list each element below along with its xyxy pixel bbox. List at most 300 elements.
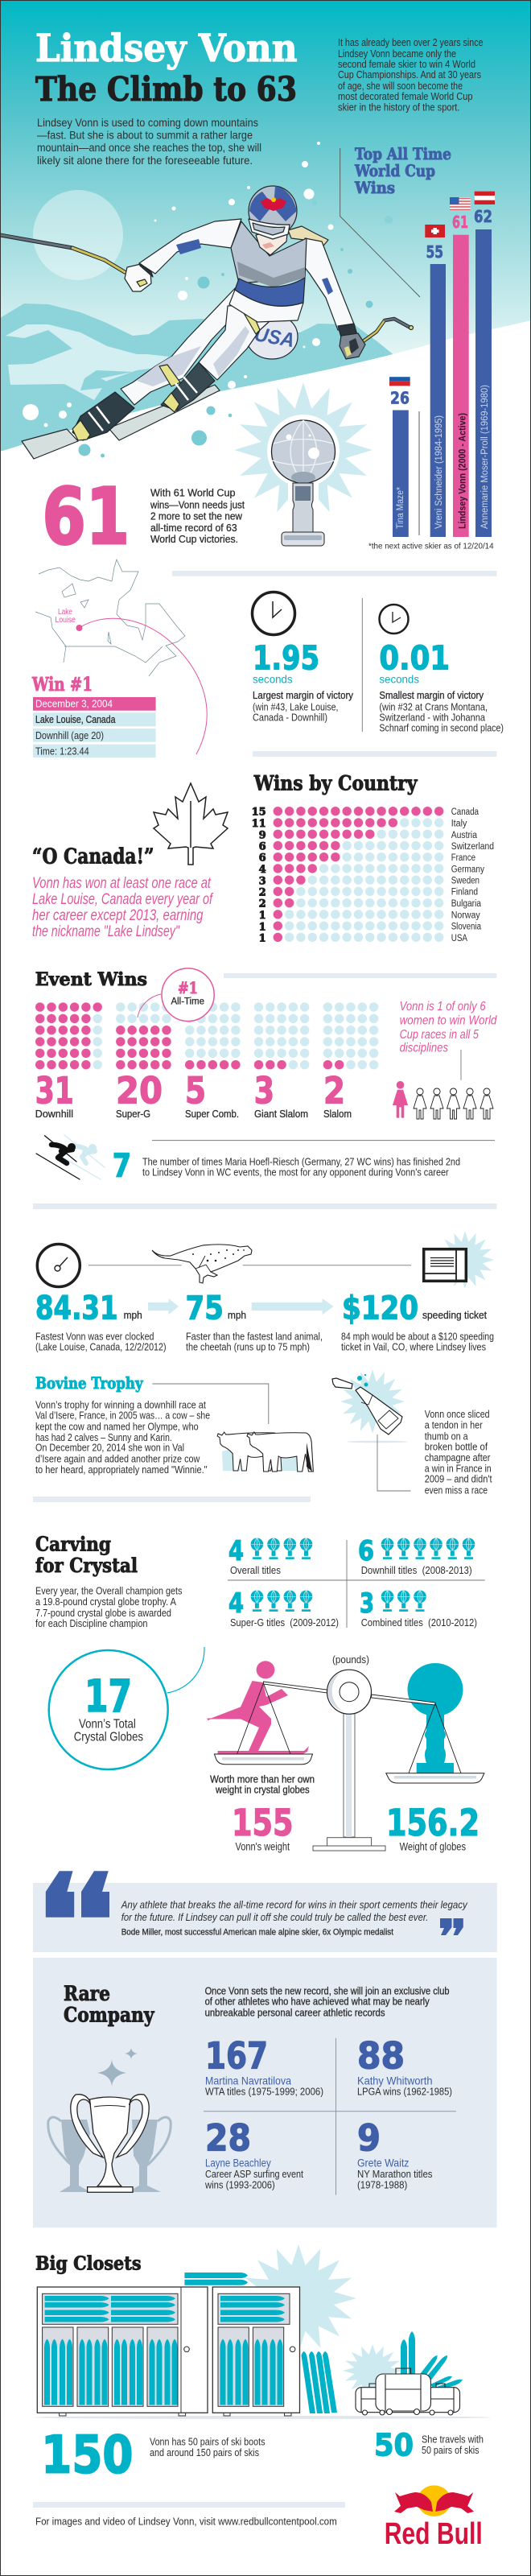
row: event (33, 729, 156, 742)
panel: wins by country: Wins by Country (253, 772, 418, 795)
numbers and event labels: 5 (185, 1070, 206, 1113)
panel: second place stat: 7 (113, 1148, 131, 1185)
panel: champagne (332, 1369, 492, 1496)
quote text (121, 1899, 468, 1937)
panel: Bode Miller quote (33, 1871, 497, 1952)
panel: balance scale (208, 1653, 484, 1852)
stat: 75 mph: mph (228, 1309, 246, 1321)
panel: margins of victory (253, 592, 504, 733)
counts: 11 (252, 818, 266, 830)
icon: two skiers (36, 1135, 105, 1179)
record: Layne Beachley: 28 (205, 2117, 251, 2160)
paragraph: even miss a race (425, 1485, 488, 1496)
numbers and event labels: 2 (323, 1070, 345, 1113)
bar: Lindsey Vonn: Lindsey Vonn (2000 - Active) (459, 413, 468, 529)
chart heading (354, 144, 451, 197)
stat: 75 mph (186, 1290, 323, 1352)
panel: big closets (34, 2244, 491, 2486)
paragraph: a win in France in (425, 1463, 492, 1474)
bar: Vreni Schneider (425, 225, 446, 537)
stat: smallest margin: (win #32 at Crans Montana, (379, 701, 488, 712)
panel: 17 total crystal globes: Crystal Globes (74, 1731, 143, 1744)
helmet logo (261, 198, 286, 211)
numbers and event labels: Downhill (35, 1108, 73, 1120)
second intro text: most decorated female World Cup (338, 90, 473, 102)
arrow (252, 1298, 334, 1315)
stat: smallest margin: seconds (379, 672, 419, 685)
icon: cows (217, 1432, 313, 1472)
stat: largest margin: 1.95 (253, 639, 319, 678)
dots: slalom (322, 1001, 380, 1071)
counts (252, 807, 266, 944)
pink italic paragraph: her career except 2013, earning (32, 907, 204, 924)
paragraph: for each Discipline champion (35, 1618, 148, 1629)
Lake Louise label (55, 608, 76, 625)
paragraph: has had 2 calves – Sunny and Karin. (35, 1432, 172, 1443)
country names: Austria (451, 831, 478, 840)
stat: 84.31 mph: (Lake Louise, Canada, 12/2/2012) (35, 1341, 167, 1352)
divider (172, 571, 496, 576)
numbers and event labels: Slalom (323, 1108, 352, 1120)
stat: 84.31 mph: mph (124, 1309, 142, 1321)
panel: win #1: Win #1 (31, 674, 93, 696)
stat: smallest margin (379, 639, 504, 733)
panel: wins by country (252, 772, 494, 944)
bar: Annemarie Moser-Proll (474, 192, 495, 537)
panel: win #1 (31, 674, 156, 758)
stat: $120 speeding ticket: ticket in Vail, CO, where Lindsey lives (341, 1341, 486, 1352)
chart heading: Wins (354, 178, 395, 197)
numbers and event labels: 3 (254, 1070, 274, 1113)
boots (72, 392, 134, 440)
country names: Finland (451, 888, 478, 898)
paragraph: Vonn’s trophy for winning a downhill race at (35, 1399, 206, 1410)
stat: 84.31 mph (35, 1290, 167, 1352)
stat: 150 pairs: Vonn has 50 pairs of ski boots (150, 2435, 266, 2447)
left glove (125, 264, 151, 291)
panel: speed (35, 1231, 494, 1352)
stat: smallest margin: Switzerland - with Johanna (379, 712, 485, 723)
record: Kathy Whitworth (357, 2034, 452, 2098)
paragraph (205, 1984, 449, 2018)
titles: combined (360, 1587, 477, 1629)
intro text: Lindsey Vonn is used to coming down mountains (37, 116, 258, 129)
stat: smallest margin: Schnarf coming in second place) (379, 722, 504, 733)
paragraph: a tendon in her (425, 1419, 483, 1430)
panel: event wins: Event Wins (35, 969, 147, 990)
second intro text: Cup Championships. And at 30 years (338, 68, 481, 80)
heading: Carving (35, 1533, 111, 1556)
hip with USA lettering: USA (253, 323, 296, 352)
record: Layne Beachley: Layne Beachley (205, 2157, 271, 2169)
paragraph: of other athletes who have achieved what may be nearly (205, 1996, 430, 2008)
paragraph: broken bottle of (425, 1441, 488, 1452)
panel: balance scale: (pounds) (332, 1653, 369, 1666)
heading: for Crystal (35, 1554, 138, 1577)
second intro text: of age, she will soon become the (338, 80, 463, 92)
stat description (150, 487, 245, 545)
counts: 3 (259, 875, 266, 887)
panel: O Canada: “O Canada!” (32, 845, 154, 869)
icon: large clock (253, 592, 294, 634)
pink italic note: Cup races in all 5 (400, 1028, 479, 1042)
heading: Company (64, 2004, 155, 2027)
quote text: Any athlete that breaks the all-time record for wins in their sport cements their legacy (121, 1899, 468, 1911)
counts: 6 (259, 852, 266, 865)
stat: largest margin: seconds (253, 672, 293, 685)
snow flakes (23, 142, 393, 457)
logo: Red Bull: Red Bull (385, 2517, 483, 2551)
counts: 2 (259, 886, 266, 898)
record: Layne Beachley (204, 2117, 303, 2191)
bar: Lindsey Vonn: 61 (452, 213, 468, 232)
panel: rare company (33, 1958, 496, 2227)
starburst (241, 2244, 356, 2352)
hair (288, 226, 328, 250)
luggage with skis (343, 2331, 463, 2415)
paragraph: On December 20, 2014 she won in Val (35, 1443, 184, 1454)
second intro text (338, 36, 483, 113)
row: time: Time: 1:23.44 (35, 745, 89, 758)
country names: Norway (451, 911, 480, 921)
description: The number of times Maria Hoefl-Riesch (Germany, 27 WC wins) has finished 2nd (142, 1156, 460, 1167)
divider (33, 1496, 311, 1502)
stat: weight of globes: 156.2 (386, 1802, 480, 1844)
pink italic paragraph: the nickname "Lake Lindsey" (32, 923, 180, 940)
panel: event wins (35, 968, 497, 1120)
icon: crystal globe trophy (234, 382, 373, 549)
intro text: mountain—and once she reaches the top, she will (37, 141, 261, 154)
record: Grete Waitz: Grete Waitz (357, 2157, 409, 2169)
numbers and event labels: Super Comb. (185, 1108, 239, 1120)
right arm (303, 238, 355, 330)
stat: 75 mph: the cheetah (runs up to 75 mph) (186, 1341, 310, 1352)
stat: largest margin: (win #43, Lake Louise, (253, 701, 338, 712)
icons: six women (393, 1081, 493, 1119)
pink italic note: women to win World (400, 1014, 497, 1028)
stat: Vonn's weight: 155 (232, 1802, 293, 1844)
panel: big closets: Big Closets (35, 2252, 142, 2274)
panel: carving for crystal (35, 1533, 485, 1629)
counts: 1 (259, 921, 266, 933)
record: Grete Waitz: 9 (357, 2117, 381, 2160)
stat: Vonn's weight: Vonn's weight (235, 1840, 290, 1852)
second intro text: second female skier to win 4 World (338, 58, 475, 70)
bar: Vreni Schneider: 55 (426, 242, 443, 262)
caption (210, 1773, 315, 1796)
record: Martina Navratilova: 167 (205, 2034, 268, 2077)
bar: Lindsey Vonn (450, 197, 471, 537)
stat description: all-time record of 63 (150, 522, 237, 534)
paragraph: unbreakable personal career athletic records (205, 2006, 385, 2018)
country names: Switzerland (451, 842, 494, 852)
bar: Vreni Schneider: Vreni Schneider (1984-1995) (434, 415, 444, 529)
titles: overall: Overall titles (230, 1565, 281, 1576)
stat: $120 speeding ticket (341, 1290, 494, 1352)
footnote: *the next active skier as of 12/20/14 (368, 542, 494, 551)
numbers and event labels: Giant Slalom (254, 1108, 308, 1120)
titles: super-g: Super-G titles (2009-2012) (230, 1617, 339, 1629)
intro text (37, 116, 261, 167)
moon (33, 190, 123, 280)
title (35, 27, 298, 109)
title: The Climb to 63 (35, 70, 297, 109)
divider (253, 751, 496, 757)
row: time (33, 745, 156, 758)
stat: 150 pairs: and around 150 pairs of skis (150, 2446, 259, 2458)
chart heading: World Cup (354, 161, 435, 180)
record: Martina Navratilova: Martina Navratilova (205, 2074, 291, 2087)
paragraph: 7.7-pound crystal globe is awarded (35, 1608, 171, 1619)
numbers and event labels (35, 1070, 352, 1120)
record: Martina Navratilova (205, 2034, 323, 2098)
stat: largest margin (253, 639, 354, 723)
row: date (33, 697, 156, 711)
paragraph: Val d’Isere, France, in 2005 was… a cow – she (35, 1410, 210, 1422)
skier (0, 186, 414, 459)
paragraph: to her heard, appropriately named "Winnie." (35, 1464, 208, 1476)
callout: #1 all-time: #1 (178, 978, 198, 997)
pink italic note: disciplines (400, 1042, 448, 1055)
titles: overall: 4 (228, 1535, 244, 1567)
stat description: With 61 World Cup (150, 487, 235, 499)
closet two (212, 2287, 299, 2416)
stat: 75 mph: 75 (186, 1290, 224, 1327)
logo: Red Bull (385, 2485, 483, 2551)
bar: Annemarie Moser-Proll: 62 (474, 207, 492, 226)
stat: 75 mph: Faster than the fastest land animal, (186, 1331, 323, 1342)
dots: downhill (35, 1001, 103, 1071)
counts: 6 (259, 841, 266, 853)
back trophies (48, 2117, 171, 2192)
record: Grete Waitz: NY Marathon titles (357, 2168, 433, 2180)
hip with USA lettering (246, 314, 298, 359)
record: Kathy Whitworth: 88 (357, 2034, 405, 2077)
stat: weight of globes: Weight of globes (400, 1840, 466, 1852)
country names: Sweden (451, 876, 480, 886)
front trophy (71, 2095, 149, 2192)
quote text: for the future. If Lindsey can pull it off she could truly be called the best ever. (121, 1911, 428, 1923)
skis behind luggage (401, 2331, 463, 2391)
titles: downhill: 6 (358, 1535, 374, 1567)
pink italic note (400, 1000, 497, 1055)
title: Lindsey Vonn (35, 27, 298, 71)
skis (22, 429, 78, 459)
counts: 4 (259, 864, 266, 876)
bar: Tina Maze (389, 373, 410, 537)
row: event: Downhill (age 20) (35, 729, 104, 741)
numbers and event labels: Super-G (116, 1108, 150, 1120)
stat: 150 pairs: 150 (41, 2426, 133, 2486)
stat: 61 wins: 61 (42, 472, 130, 562)
footer text: For images and video of Lindsey Vonn, visit www.redbullcontentpool.com (35, 2516, 337, 2528)
titles: super-g: 4 (228, 1587, 244, 1620)
row: location (33, 712, 156, 726)
stat: 50 pairs: 50 pairs of skis (422, 2444, 480, 2456)
Lake Louise label: Louise (55, 616, 76, 625)
skier on left pan (208, 1661, 309, 1754)
floor shadow (34, 2416, 491, 2419)
icon: cheetah (152, 1245, 252, 1283)
country names: USA (451, 934, 467, 943)
pink italic paragraph (32, 875, 213, 940)
panel: 17 total crystal globes (49, 1647, 204, 1769)
titles: downhill (358, 1535, 475, 1576)
country names: Slovenia (451, 923, 482, 932)
record: Grete Waitz (357, 2117, 433, 2191)
stat description: World Cup victories. (150, 533, 238, 545)
icon: speeding ticket (424, 1231, 494, 1289)
legs (121, 284, 241, 405)
second intro text: Lindsey Vonn became only the (338, 47, 456, 60)
stat description: 2 more to set the new (150, 510, 243, 522)
description (142, 1156, 460, 1179)
pink italic note: Vonn is 1 of only 6 (400, 1000, 486, 1013)
paragraph: Vonn once sliced (425, 1409, 490, 1420)
right glove (340, 333, 365, 359)
map of Canada (35, 559, 207, 754)
counts: 2 (259, 898, 266, 910)
stat: 50 pairs: She travels with (422, 2434, 484, 2446)
counts: 1 (259, 932, 266, 944)
panel: 17 total crystal globes: Vonn’s Total (79, 1718, 136, 1732)
right pan (386, 1703, 484, 1783)
panel: hero (0, 0, 531, 564)
icon: trophies (48, 2095, 171, 2192)
closet one (37, 2287, 208, 2416)
stat: largest margin: Canada - Downhill) (253, 712, 327, 723)
titles: combined: 3 (360, 1587, 374, 1620)
callout: #1 all-time (138, 968, 214, 1021)
second intro text: It has already been over 2 years since (338, 36, 483, 48)
stat: largest margin: Largest margin of victory (253, 690, 354, 701)
country names: Canada (451, 807, 480, 817)
second intro text: skier in the history of the sport. (338, 101, 460, 113)
titles: overall (228, 1535, 312, 1576)
record: Layne Beachley: wins (1993-2006) (204, 2179, 275, 2191)
dots: super-g (115, 1001, 172, 1071)
paragraph (425, 1409, 492, 1496)
record: Grete Waitz: (1978-1988) (357, 2179, 407, 2191)
Lake Louise label: Lake (58, 608, 72, 617)
head and helmet (249, 186, 297, 255)
counts: 15 (252, 807, 266, 819)
mountains (0, 303, 402, 451)
stat: 50 pairs: 50 (374, 2428, 414, 2463)
icon: small clock (380, 605, 409, 634)
divider (33, 2502, 345, 2508)
country names: Italy (451, 819, 467, 829)
paragraph: 2009 – and didn't (425, 1474, 492, 1485)
stat: smallest margin: 0.01 (379, 639, 450, 678)
row: date: December 3, 2004 (35, 697, 113, 709)
arrow (148, 1298, 179, 1315)
bar: Tina Maze: 26 (390, 388, 410, 407)
stat: 50 pairs (374, 2428, 484, 2463)
paragraph (35, 1586, 182, 1629)
stat description: wins—Vonn needs just (150, 499, 245, 511)
stat: $120 speeding ticket: 84 mph would be about a $120 speeding (341, 1331, 494, 1342)
paragraph: Once Vonn sets the new record, she will join an exclusive club (205, 1984, 449, 1996)
counts: 9 (259, 829, 266, 841)
paragraph: kept the cow and named her Olympe, who (35, 1422, 199, 1433)
paragraph: champagne after (425, 1452, 490, 1463)
stat: 61 wins (42, 472, 245, 562)
ski poles (0, 235, 410, 342)
stand (313, 1711, 385, 1851)
panel: bovine trophy: Bovine Trophy (35, 1373, 144, 1393)
skis on top of closet (184, 2273, 248, 2285)
record: Layne Beachley: Career ASP surfing event (205, 2168, 303, 2180)
left arm (139, 219, 241, 274)
paragraph: a 19.8-pound crystal globe trophy. A (35, 1596, 176, 1608)
heading (64, 1982, 155, 2027)
torso (231, 221, 307, 283)
pink italic paragraph: Lake Louise, Canada every year of (32, 891, 213, 908)
caption: Worth more than her own (210, 1773, 315, 1785)
stat: 150 pairs (41, 2426, 266, 2486)
icon: closing quote mark (440, 1918, 463, 1935)
country names: Germany (451, 865, 484, 874)
globe on right pan (407, 1663, 463, 1773)
record: Kathy Whitworth: Kathy Whitworth (357, 2074, 433, 2087)
dots: giant slalom (253, 1001, 311, 1071)
panel: top all time wins chart (340, 144, 495, 551)
beam and pivot (263, 1670, 435, 1714)
country names (451, 807, 494, 943)
heading: Rare (64, 1982, 110, 2005)
quote text: Bode Miller, most successful American male alpine skier, 6x Olympic medalist (121, 1927, 393, 1937)
paragraph: d’Isere again and added another prize cow (35, 1454, 200, 1465)
pink italic paragraph: Vonn has won at least one race at (32, 875, 212, 892)
country names: Bulgaria (451, 899, 482, 909)
titles: super-g (228, 1587, 339, 1629)
record: Martina Navratilova: WTA titles (1975-1999; 2006) (205, 2086, 323, 2098)
stat: $120 speeding ticket: $120 (342, 1290, 418, 1327)
bar: Annemarie Moser-Proll: Annemarie Moser-Proll (1969-1980) (480, 385, 490, 529)
stat: 84.31 mph: Fastest Vonn was ever clocked (35, 1331, 154, 1342)
stat: $120 speeding ticket: speeding ticket (422, 1309, 487, 1321)
intro text: —fast. But she is about to summit a rather large (37, 129, 253, 142)
callout: #1 all-time: All-Time (171, 997, 204, 1007)
description: to Lindsey Vonn in WC events, the most for any opponent during Vonn's career (142, 1167, 449, 1179)
intro text: likely sit alone there for the foreseeable future. (37, 154, 253, 167)
paragraph: Every year, the Overall champion gets (35, 1586, 182, 1597)
leaning skis (301, 2351, 337, 2413)
snow slope (0, 320, 531, 564)
panel: second place stat (36, 1135, 495, 1185)
caption: weight in crystal globes (215, 1785, 310, 1796)
bar: Tina Maze: Tina Maze* (396, 487, 405, 529)
panel: 17 total crystal globes: 17 (84, 1670, 132, 1722)
paragraph (35, 1399, 210, 1476)
numbers and event labels: 31 (35, 1070, 74, 1113)
sky gradient (0, 0, 531, 354)
country names: France (451, 853, 475, 863)
stat: smallest margin: Smallest margin of victory (379, 690, 484, 701)
numbers and event labels: 20 (116, 1070, 163, 1113)
dot matrix (272, 806, 445, 943)
panel: bovine trophy (35, 1373, 313, 1476)
left pan (214, 1683, 312, 1765)
dots: super combined (184, 1001, 241, 1071)
icon: sparkles (97, 2048, 138, 2087)
paragraph: thumb on a (425, 1430, 468, 1442)
row: location: Lake Louise, Canada (35, 714, 116, 725)
stat: 84.31 mph: 84.31 (35, 1290, 117, 1327)
chart heading: Top All Time (355, 144, 451, 163)
icon: maple leaf (154, 783, 228, 865)
